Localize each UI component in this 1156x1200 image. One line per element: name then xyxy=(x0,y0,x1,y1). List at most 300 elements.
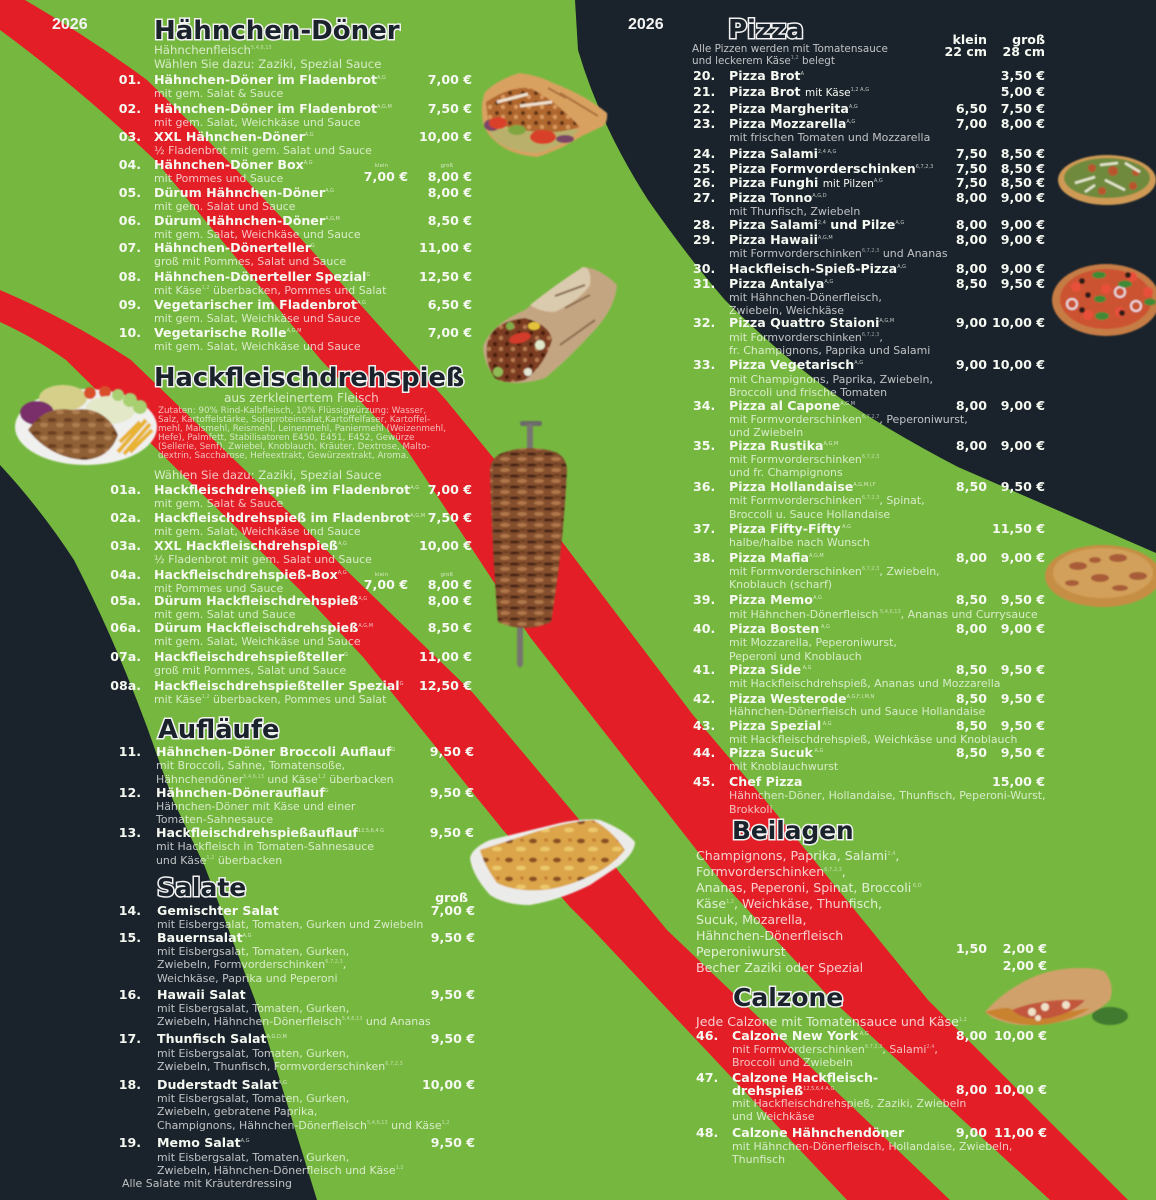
item 37 xyxy=(692,522,1048,550)
item 13: mit Hackfleisch in Tomaten-Sahnesauce xyxy=(156,840,374,853)
item 04a: klein xyxy=(375,572,388,578)
item 35: 8,00 xyxy=(956,438,987,453)
intro text xyxy=(154,43,381,71)
item 10: 7,00 € xyxy=(428,325,472,340)
item 13: 9,50 € xyxy=(430,825,474,840)
intro text xyxy=(692,43,888,67)
item 44: 9,50 € xyxy=(1001,745,1045,760)
item 04: groß xyxy=(441,163,453,169)
item 23: 23. xyxy=(693,116,715,131)
side dishes list: Sucuk, Mozarella, xyxy=(696,912,806,927)
item 32: 9,00 xyxy=(956,315,987,330)
item 46: mit Formvorderschinken6,7,2,3, Salami2,4, xyxy=(732,1043,938,1056)
item 47: mit Hackfleischdrehspieß, Zaziki, Zwiebeln xyxy=(732,1097,966,1110)
item 39: mit Hähnchen-Dönerfleisch 5,4,6,13, Ananas und Currysauce xyxy=(729,608,1038,621)
item 35 xyxy=(692,439,1048,480)
item 04: klein xyxy=(375,163,388,169)
item 45 xyxy=(692,775,1048,817)
item 43: 8,50 xyxy=(956,718,987,733)
item 14: Gemischter Salat xyxy=(157,903,279,918)
item 15: mit Eisbergsalat, Tomaten, Gurken, xyxy=(157,945,349,958)
item 22: Pizza MargheritaA,G xyxy=(729,101,858,116)
item 08a: 08a. xyxy=(110,678,141,693)
item 32: mit Formvorderschinken6,7,2,3, xyxy=(729,331,883,344)
item 09 xyxy=(119,297,472,325)
item 38: Knoblauch (scharf) xyxy=(729,578,832,591)
item 20: Pizza BrotA xyxy=(729,68,804,83)
item 11: 11. xyxy=(119,744,141,759)
item 36: mit Formvorderschinken6,7,2,3, Spinat, xyxy=(729,494,925,507)
item 22 xyxy=(693,101,1045,116)
item 35: und fr. Champignons xyxy=(729,466,843,479)
item 32: fr. Champignons, Paprika und Salami xyxy=(729,344,930,357)
item 45: Chef Pizza xyxy=(729,774,802,789)
item 23: 8,00 € xyxy=(1001,116,1045,131)
ingredients text: Zutaten: 90% Rind-Kalbfleisch, 10% Flüssigwürzung: Wasser, xyxy=(158,406,426,416)
item 32: 32. xyxy=(693,315,715,330)
heading: Calzone xyxy=(733,983,843,1012)
item 08a: Hackfleischdrehspießteller SpezialG xyxy=(154,678,403,693)
size label: groß xyxy=(435,890,468,905)
ingredients text: Salz, Kartoffelstärke, Sojaproteinsalat,Kartoffelfaser, Kartoffel- xyxy=(158,415,430,425)
ingredients text: mehl, Maismehl, Reismehl, Leinenmehl, Paniermehl (Weizenmehl, xyxy=(158,424,446,434)
sauce choice: Wählen Sie dazu: Zaziki, Spezial Sauce xyxy=(154,468,381,482)
item 39: Pizza MemoA,G xyxy=(729,592,822,607)
subheading: aus zerkleinertem Fleisch xyxy=(224,391,379,405)
ingredients text: Hefe), Palmfett, Stabilisatoren E450, E451, E452, Gewürze xyxy=(158,433,414,443)
item 02: 02. xyxy=(119,101,141,116)
food: pizza with rocket xyxy=(1058,155,1156,205)
side dishes list xyxy=(696,848,921,973)
item 27: 8,00 xyxy=(956,190,987,205)
item 31: 8,50 xyxy=(956,276,987,291)
item 03a: 03a. xyxy=(110,538,141,553)
item 06 xyxy=(119,213,472,241)
item 11 xyxy=(119,744,474,786)
item 03a xyxy=(110,538,472,566)
item 48: mit Hähnchen-Dönerfleisch, Hollandaise, Zwiebeln, xyxy=(732,1140,1012,1153)
heading: Aufläufe xyxy=(158,715,279,745)
item 28: 28. xyxy=(693,217,715,232)
item 24 xyxy=(692,147,1048,161)
item 40 xyxy=(692,622,1048,664)
item 43 xyxy=(692,719,1048,746)
item 35: Pizza RustikaA,G,M xyxy=(729,438,838,453)
item 29: 8,00 xyxy=(956,232,987,247)
item 02 xyxy=(119,101,472,129)
item 04 xyxy=(119,157,472,185)
item 23 xyxy=(692,117,1048,145)
item 03a: 10,00 € xyxy=(419,538,472,553)
item 31: 9,50 € xyxy=(1001,276,1045,291)
item 38 xyxy=(692,551,1048,592)
side dishes list: Formvorderschinken6,7,2,3, xyxy=(696,864,846,879)
item 36: 36. xyxy=(693,479,715,494)
side dish prices large xyxy=(1003,940,1047,974)
item 07a: 11,00 € xyxy=(419,649,472,664)
heading: Salate xyxy=(157,873,246,902)
item 05a: Dürum HackfleischdrehspießA,G xyxy=(154,593,367,608)
side dish prices large: 2,00 € xyxy=(1003,941,1047,956)
item 22: 22. xyxy=(693,101,715,116)
heading: Beilagen xyxy=(732,816,854,845)
size header large xyxy=(1002,32,1045,59)
item 05a: mit gem. Salat und Sauce xyxy=(154,608,296,621)
item 09: mit gem. Salat, Weichkäse und Sauce xyxy=(154,312,361,325)
item 01a: mit gem. Salat & Sauce xyxy=(154,497,283,510)
item 41 xyxy=(692,663,1048,691)
side dishes list: Champignons, Paprika, Salami2,4, xyxy=(696,848,899,863)
item 08a xyxy=(110,678,472,706)
item 15: Weichkäse, Paprika und Peperoni xyxy=(157,972,338,985)
food: plate with meat and salad xyxy=(15,385,157,465)
item 04: 8,00 € xyxy=(428,169,472,184)
item 41: 41. xyxy=(693,662,715,677)
item 02: Hähnchen-Döner im FladenbrotA,G,M xyxy=(154,101,392,116)
item 08a: mit Käse1,2 überbacken, Pommes und Salat xyxy=(154,693,386,706)
item 36: Broccoli u. Sauce Hollandaise xyxy=(729,508,890,521)
red band lower xyxy=(0,290,950,1200)
item 36: Pizza HollandaiseA,G,M,I,F xyxy=(729,479,876,494)
item 33 xyxy=(692,358,1048,400)
item 24: 24. xyxy=(693,146,715,161)
item 06a: 06a. xyxy=(110,620,141,635)
item 30: 9,00 € xyxy=(1001,261,1045,276)
item 44: Pizza Sucuk A,G xyxy=(729,745,823,760)
item 19: Zwiebeln, Hähnchen-Dönerfleisch und Käse1,2 xyxy=(157,1164,404,1177)
item 34: 34. xyxy=(693,398,715,413)
item 04a: Hackfleischdrehspieß-BoxA,G xyxy=(154,567,347,582)
item 06: 8,50 € xyxy=(428,213,472,228)
item 48: Calzone Hähnchendöner xyxy=(732,1125,904,1140)
item 07: 07. xyxy=(119,240,141,255)
item 47: drehspieß12,5,6,4 A,G xyxy=(732,1083,834,1098)
item 16: 9,50 € xyxy=(431,987,475,1002)
panel: Hähnchen-Döner xyxy=(119,16,472,353)
item 18: Duderstadt SalatA,G xyxy=(157,1077,287,1092)
item 39: 9,50 € xyxy=(1001,592,1045,607)
item 31: Zwiebeln, Weichkäse xyxy=(729,304,844,317)
item 09: Vegetarischer im FladenbrotA,G xyxy=(154,297,366,312)
item 37: 37. xyxy=(693,521,715,536)
side dishes list: Becher Zaziki oder Spezial xyxy=(696,960,863,975)
item 17: mit Eisbergsalat, Tomaten, Gurken, xyxy=(157,1047,349,1060)
item 37: 11,50 € xyxy=(992,521,1045,536)
item 35: 35. xyxy=(693,438,715,453)
item 04a: mit Pommes und Sauce xyxy=(154,582,283,595)
item 28: 9,00 € xyxy=(1001,217,1045,232)
item 13: und Käse1,2 überbacken xyxy=(156,854,282,867)
panel: Beilagen xyxy=(692,816,1048,976)
item 26: 8,50 € xyxy=(1001,175,1045,190)
item 27 xyxy=(692,191,1048,219)
item 24: 7,50 xyxy=(956,146,987,161)
item 18: Champignons, Hähnchen-Dönerfleisch5,4,6,13 und Käse1,2 xyxy=(157,1119,450,1132)
item 07a: 07a. xyxy=(110,649,141,664)
panel: Aufläufe xyxy=(119,715,474,867)
item 19: 19. xyxy=(119,1135,141,1150)
item 16: Hawaii Salat xyxy=(157,987,246,1002)
item 01a xyxy=(110,482,472,510)
item 36 xyxy=(692,480,1048,522)
item 03: 03. xyxy=(119,129,141,144)
item 29: 29. xyxy=(693,232,715,247)
item 42: Pizza WesterodeA,G,F,I,M,N xyxy=(729,691,874,706)
item 46: 46. xyxy=(696,1028,718,1043)
side dishes list: Käse1,2, Weichkäse, Thunfisch, xyxy=(696,896,882,911)
item 06a: 8,50 € xyxy=(428,620,472,635)
item 23: Pizza MozzarellaA,G xyxy=(729,116,855,131)
item 33: mit Champignons, Paprika, Zwiebeln, xyxy=(729,373,933,386)
item 25 xyxy=(692,162,1048,176)
item 42 xyxy=(692,692,1048,719)
size header small: 22 cm xyxy=(944,44,987,59)
item 06: mit gem. Salat, Weichkäse und Sauce xyxy=(154,228,361,241)
item 37: Pizza Fifty-Fifty A,G xyxy=(729,521,851,536)
item 21: Pizza Brot mit Käse1,2 A,G xyxy=(729,84,869,99)
size header large: 28 cm xyxy=(1002,44,1045,59)
item 22: 7,50 € xyxy=(1001,101,1045,116)
item 16: Zwiebeln, Hähnchen-Dönerfleisch5,4,6,13 und Ananas xyxy=(157,1015,431,1028)
item 12: Hähnchen-DönerauflaufG xyxy=(156,785,329,800)
item 03: 10,00 € xyxy=(419,129,472,144)
item 03: ½ Fladenbrot mit gem. Salat und Sauce xyxy=(154,144,372,157)
item 23: 7,00 xyxy=(956,116,987,131)
item 40: Pizza Bosten A,G xyxy=(729,621,830,636)
item 14: mit Eisbergsalat, Tomaten, Gurken und Zwiebeln xyxy=(157,918,423,931)
item 29: Pizza HawaiiA,G,M xyxy=(729,232,833,247)
ingredients text xyxy=(158,406,446,461)
heading: Pizza xyxy=(728,15,804,45)
item 08: 12,50 € xyxy=(419,269,472,284)
item 04: 7,00 € xyxy=(364,169,408,184)
item 31: Pizza AntalyaA,G xyxy=(729,276,833,291)
item 02: 7,50 € xyxy=(428,101,472,116)
item 08 xyxy=(119,269,472,297)
item 48: 11,00 € xyxy=(994,1125,1047,1140)
panel: Calzone xyxy=(692,982,1048,1170)
item 01: Hähnchen-Döner im FladenbrotA,G xyxy=(154,72,386,87)
item 36: 9,50 € xyxy=(1001,479,1045,494)
item 21: 5,00 € xyxy=(1001,84,1045,99)
item 48: 9,00 xyxy=(956,1125,987,1140)
item 08: mit Käse1,2 überbacken, Pommes und Salat xyxy=(154,284,386,297)
item 04a xyxy=(110,567,472,595)
dark area top right xyxy=(575,0,1156,553)
item 19 xyxy=(119,1135,475,1177)
item 41: 9,50 € xyxy=(1001,662,1045,677)
item 12: Tomaten-Sahnesauce xyxy=(156,813,273,826)
item 41: 8,50 xyxy=(956,662,987,677)
item 27: mit Thunfisch, Zwiebeln xyxy=(729,205,860,218)
item 47: und Weichkäse xyxy=(732,1110,814,1123)
item 07: Hähnchen-DönertellerG xyxy=(154,240,315,255)
intro text: Jede Calzone mit Tomatensauce und Käse1,2 xyxy=(696,1014,967,1029)
item 10: mit gem. Salat, Weichkäse und Sauce xyxy=(154,340,361,353)
food: rotating meat skewer xyxy=(490,421,567,668)
panel: Salate xyxy=(119,873,475,1190)
item 12: Hähnchen-Döner mit Käse und einer xyxy=(156,800,355,813)
item 34: 9,00 € xyxy=(1001,398,1045,413)
item 29 xyxy=(692,233,1048,261)
item 15: BauernsalatA,G xyxy=(157,930,252,945)
item 16: 16. xyxy=(119,987,141,1002)
item 08: Hähnchen-Dönerteller SpezialG xyxy=(154,269,370,284)
food: pepperoni pizza xyxy=(1052,264,1156,336)
item 06: Dürum Hähnchen-DönerA,G,M xyxy=(154,213,340,228)
year label left: 2026 xyxy=(52,16,88,33)
food: durum wrap xyxy=(483,267,617,383)
size header small: klein xyxy=(952,32,987,47)
item 32: 10,00 € xyxy=(992,315,1045,330)
item 13: Hackfleischdrehspießauflauf12,5,6,4 G xyxy=(156,825,384,840)
item 15: 15. xyxy=(119,930,141,945)
item 09: 6,50 € xyxy=(428,297,472,312)
item 04a: 7,00 € xyxy=(364,577,408,592)
item 41: mit Hackfleischdrehspieß, Ananas und Mozzarella xyxy=(729,677,1000,690)
item 45: 45. xyxy=(693,774,715,789)
item 08a: 12,50 € xyxy=(419,678,472,693)
item 25: 7,50 xyxy=(956,161,987,176)
item 30: 30. xyxy=(693,261,715,276)
item 39: 8,50 xyxy=(956,592,987,607)
item 05: mit gem. Salat und Sauce xyxy=(154,200,296,213)
item 01a: 01a. xyxy=(110,482,141,497)
item 42: Hähnchen-Dönerfleisch und Sauce Hollandaise xyxy=(729,705,985,718)
item 01: mit gem. Salat & Sauce xyxy=(154,87,283,100)
item 35: mit Formvorderschinken6,7,2,3 xyxy=(729,453,879,466)
item 11: Hähnchendöner5,4,6,13 und Käse1,2 überbacken xyxy=(156,773,394,786)
item 46: Broccoli und Zwiebeln xyxy=(732,1056,853,1069)
intro text: Alle Pizzen werden mit Tomatensauce xyxy=(692,43,888,55)
item 05: Dürum Hähnchen-DönerA,G xyxy=(154,185,334,200)
item 17: 9,50 € xyxy=(431,1031,475,1046)
item 02: mit gem. Salat, Weichkäse und Sauce xyxy=(154,116,361,129)
item 43: 43. xyxy=(693,718,715,733)
item 02a: Hackfleischdrehspieß im FladenbrotA,G,M xyxy=(154,510,425,525)
item 01a: 7,00 € xyxy=(428,482,472,497)
dark area bottom left xyxy=(0,465,317,1200)
footnote: Alle Salate mit Kräuterdressing xyxy=(122,1177,292,1190)
item 03a: XXL HackfleischdrehspießA,G xyxy=(154,538,347,553)
item 34: und Zwiebeln xyxy=(729,426,803,439)
item 28 xyxy=(692,218,1048,232)
heading: Hähnchen-Döner xyxy=(154,16,400,46)
item 07a: HackfleischdrehspießtellerG xyxy=(154,649,348,664)
item 05: 8,00 € xyxy=(428,185,472,200)
item 45: Hähnchen-Döner, Hollandaise, Thunfisch, Peperoni-Wurst, xyxy=(729,789,1046,802)
item 26: 7,50 xyxy=(956,175,987,190)
item 28: 8,00 xyxy=(956,217,987,232)
item 01a: Hackfleischdrehspieß im FladenbrotA,G xyxy=(154,482,419,497)
item 07 xyxy=(119,240,472,268)
item 03 xyxy=(119,129,472,157)
item 05a: 05a. xyxy=(110,593,141,608)
item 36: 8,50 xyxy=(956,479,987,494)
item 43: 9,50 € xyxy=(1001,718,1045,733)
item 22: 6,50 xyxy=(956,101,987,116)
item 38: 9,00 € xyxy=(1001,550,1045,565)
item 17: Zwiebeln, Thunfisch, Formvorderschinken6,7,2,3 xyxy=(157,1060,403,1073)
side dishes list: Hähnchen-Dönerfleisch xyxy=(696,928,843,943)
intro text: Wählen Sie dazu: Zaziki, Spezial Sauce xyxy=(154,57,381,71)
item 21: 21. xyxy=(693,84,715,99)
item 47: 8,00 xyxy=(956,1082,987,1097)
item 47 xyxy=(692,1071,1048,1124)
item 04a: groß xyxy=(441,572,453,578)
heading: Hackfleischdrehspieß xyxy=(154,363,464,393)
item 43: Pizza Spezial A,G xyxy=(729,718,832,733)
item 45: 15,00 € xyxy=(992,774,1045,789)
item 18: Zwiebeln, gebratene Paprika, xyxy=(157,1105,317,1118)
item 34: 8,00 xyxy=(956,398,987,413)
item 24: Pizza Salami2,4 A,G xyxy=(729,146,836,161)
size header small xyxy=(944,32,987,59)
item 05a: 8,00 € xyxy=(428,593,472,608)
item 13 xyxy=(119,825,474,867)
item 42: 42. xyxy=(693,691,715,706)
item 19: Memo SalatA,G xyxy=(157,1135,250,1150)
item 14: 14. xyxy=(119,903,141,918)
item 47: 47. xyxy=(696,1070,718,1085)
item 33: Broccoli und frische Tomaten xyxy=(729,386,887,399)
item 19: 9,50 € xyxy=(431,1135,475,1150)
item 35: 9,00 € xyxy=(1001,438,1045,453)
side dish prices small: 1,50 xyxy=(956,941,987,956)
item 40: Peperoni und Knoblauch xyxy=(729,650,862,663)
item 29: mit Formvorderschinken6,7,2,3 und Ananas xyxy=(729,247,948,260)
item 07: groß mit Pommes, Salat und Sauce xyxy=(154,255,346,268)
item 46: 10,00 € xyxy=(994,1028,1047,1043)
food: calzone xyxy=(985,968,1128,1025)
item 06: 06. xyxy=(119,213,141,228)
item 25: 8,50 € xyxy=(1001,161,1045,176)
item 14: 7,00 € xyxy=(431,903,475,918)
item 07: 11,00 € xyxy=(419,240,472,255)
item 10: 10. xyxy=(119,325,141,340)
item 01 xyxy=(119,72,472,100)
item 06a: Dürum HackfleischdrehspießA,G,M xyxy=(154,620,373,635)
item 25: 25. xyxy=(693,161,715,176)
item 42: 8,50 xyxy=(956,691,987,706)
item 38: mit Formvorderschinken6,7,2,3, Zwiebeln, xyxy=(729,565,940,578)
item 39 xyxy=(692,593,1048,622)
item 20: 3,50 € xyxy=(1001,68,1045,83)
item 24: 8,50 € xyxy=(1001,146,1045,161)
side dish prices large: 2,00 € xyxy=(1003,958,1047,973)
food: casserole dish xyxy=(470,819,635,905)
item 06a: mit gem. Salat, Weichkäse und Sauce xyxy=(154,635,361,648)
item 05: 05. xyxy=(119,185,141,200)
item 47: 10,00 € xyxy=(994,1082,1047,1097)
item 38: 8,00 xyxy=(956,550,987,565)
item 46 xyxy=(692,1029,1048,1070)
item 08: 08. xyxy=(119,269,141,284)
item 30: 8,00 xyxy=(956,261,987,276)
item 25: Pizza Formvorderschinken6,7,2,3 xyxy=(729,161,933,176)
item 27: Pizza TonnoA,G,D xyxy=(729,190,827,205)
item 04: Hähnchen-Döner BoxA,G xyxy=(154,157,313,172)
item 48 xyxy=(692,1126,1048,1167)
ingredients text: dextrin, Saccharose, Hefeextrakt, Gewürzextrakt, Aroma. xyxy=(158,451,409,461)
item 23: mit frischen Tomaten und Mozzarella xyxy=(729,131,930,144)
item 40: 9,00 € xyxy=(1001,621,1045,636)
item 12 xyxy=(119,785,474,826)
item 37: halbe/halbe nach Wunsch xyxy=(729,536,870,549)
item 46: 8,00 xyxy=(956,1028,987,1043)
item 12: 12. xyxy=(119,785,141,800)
item 10 xyxy=(119,325,472,353)
